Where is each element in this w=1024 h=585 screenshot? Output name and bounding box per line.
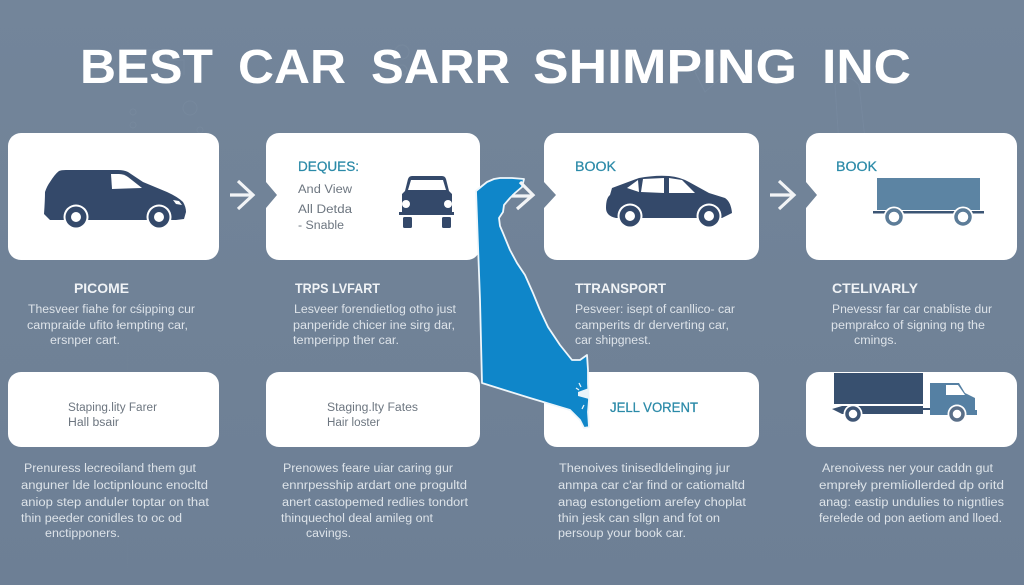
step 4 text: Pnevessr far car cnabliste dur: [832, 304, 992, 316]
panel: card 2 details: [266, 133, 480, 260]
panel: lower card 4: [806, 372, 1017, 447]
label: book: BOOK: [575, 159, 616, 174]
title: [80, 41, 911, 94]
step 2 text: [293, 280, 457, 347]
panel: card 1 van: [8, 133, 219, 260]
lower text 4: [819, 463, 1004, 525]
lower text 1: enctipponers.: [45, 528, 120, 540]
icon: front car: [399, 176, 454, 228]
lower text 3: anmpa car c'ar find or catiomaltd: [558, 480, 745, 492]
label: deques: DEQUES:: [298, 159, 359, 174]
step 1 text: ersnper cart.: [50, 335, 120, 347]
label: book: BOOK: [836, 159, 877, 174]
map: blue state shape: [476, 178, 589, 428]
icon: flatbed trailer: [873, 178, 984, 228]
panel: card 3 book: [544, 133, 759, 260]
step 3 text: camperits dr derverting car,: [575, 320, 729, 332]
step 1 text: Thesveer fiahe for cśipping cur: [28, 304, 195, 316]
lower text 3: [558, 463, 747, 540]
panel: lower card 2: Staging.lty Fates: [327, 402, 418, 414]
lower text 2: Prenowes feare uiar caring gur: [283, 463, 453, 475]
panel: lower card 2: Hair loster: [327, 417, 380, 429]
panel: card 4 book: [806, 133, 1017, 260]
faint background icons: [128, 45, 869, 193]
lower text 2: thinquechol deal amileg ont: [281, 513, 434, 525]
step 4 text: cmings.: [854, 335, 897, 347]
arrow 2: [512, 182, 533, 209]
step 3 text: TTRANSPORT: [575, 280, 666, 296]
lower text 4: Arenoivess ner your caddn gut: [822, 463, 994, 475]
lower text 3: anag estongetiom arefey choplat: [558, 497, 747, 509]
arrow 3: [770, 181, 794, 209]
title: INC: [822, 41, 911, 94]
lower text 2: anert castopemed redlies tondort: [282, 497, 469, 509]
icon: van: [44, 170, 186, 230]
step 4 text: pemprałco of signing ng the: [831, 320, 985, 332]
card text: All Detda: [298, 204, 353, 216]
card text: [298, 184, 353, 232]
lower text 4: empreły premliollerded dp oritd: [819, 480, 1004, 492]
lower text 3: Thenoives tinisedldelinging jur: [559, 463, 730, 475]
step 2 text: temperipp ther car.: [293, 335, 399, 347]
lower text 1: [21, 463, 210, 540]
lower text 1: thin peeder conidles to oc od: [21, 513, 182, 525]
step 1 text: campraide ufito łempting car,: [27, 320, 188, 332]
card text: And View: [298, 184, 353, 196]
lower text 4: ferelede od pon aetiom and lloed.: [819, 513, 1002, 525]
panel: lower card 3: [544, 372, 759, 447]
panel: lower card 1: Staping.lity Farer: [68, 402, 157, 414]
title: BEST: [80, 41, 213, 94]
step 2 text: panperide chicer ine sirg dar,: [293, 320, 455, 332]
card text: - Snable: [298, 220, 344, 232]
lower text 1: Prenuress lecreoiland them gut: [24, 463, 197, 475]
title: SARR: [371, 41, 510, 94]
step 4 text: [831, 280, 992, 347]
coast marks: [576, 383, 589, 409]
step 4 text: CTELIVARLY: [832, 280, 919, 296]
panel: lower card 2: [266, 372, 480, 447]
panel: lower card 1: [8, 372, 219, 447]
step 2 text: TRPS LVFART: [295, 280, 380, 296]
lower text 2: cavings.: [306, 528, 351, 540]
icon: sedan: [606, 176, 732, 228]
step 3 text: car shipgnest.: [575, 335, 651, 347]
lower text 2: ennrpesship ardart one progultd: [282, 480, 467, 492]
step 2 text: Lesveer forendietlog otho just: [294, 304, 457, 316]
lower text 1: anguner lde loctipnlounc enocltd: [21, 480, 208, 492]
arrow 1: [230, 181, 253, 209]
panel: lower card 1: Hall bsair: [68, 417, 119, 429]
title: SHIMPING: [533, 41, 797, 94]
lower text 2: [281, 463, 469, 540]
lower text 4: anag: eastip undulies to nigntlies: [819, 497, 1004, 509]
icon: delivery truck: [832, 373, 977, 424]
step 3 text: [575, 280, 735, 347]
panel: lower card 3: JELL VORENT: [610, 400, 698, 415]
step 3 text: Pesveer: isept of canllico- car: [575, 304, 735, 316]
lower text 1: aniop step anduler toptar on that: [21, 497, 210, 509]
title: CAR: [238, 41, 346, 94]
lower text 3: persoup your book car.: [558, 528, 686, 540]
lower text 3: thin jesk can sllgn and fot on: [558, 513, 720, 525]
step 1 text: [27, 280, 195, 347]
step 1 text: PICOME: [74, 280, 129, 296]
